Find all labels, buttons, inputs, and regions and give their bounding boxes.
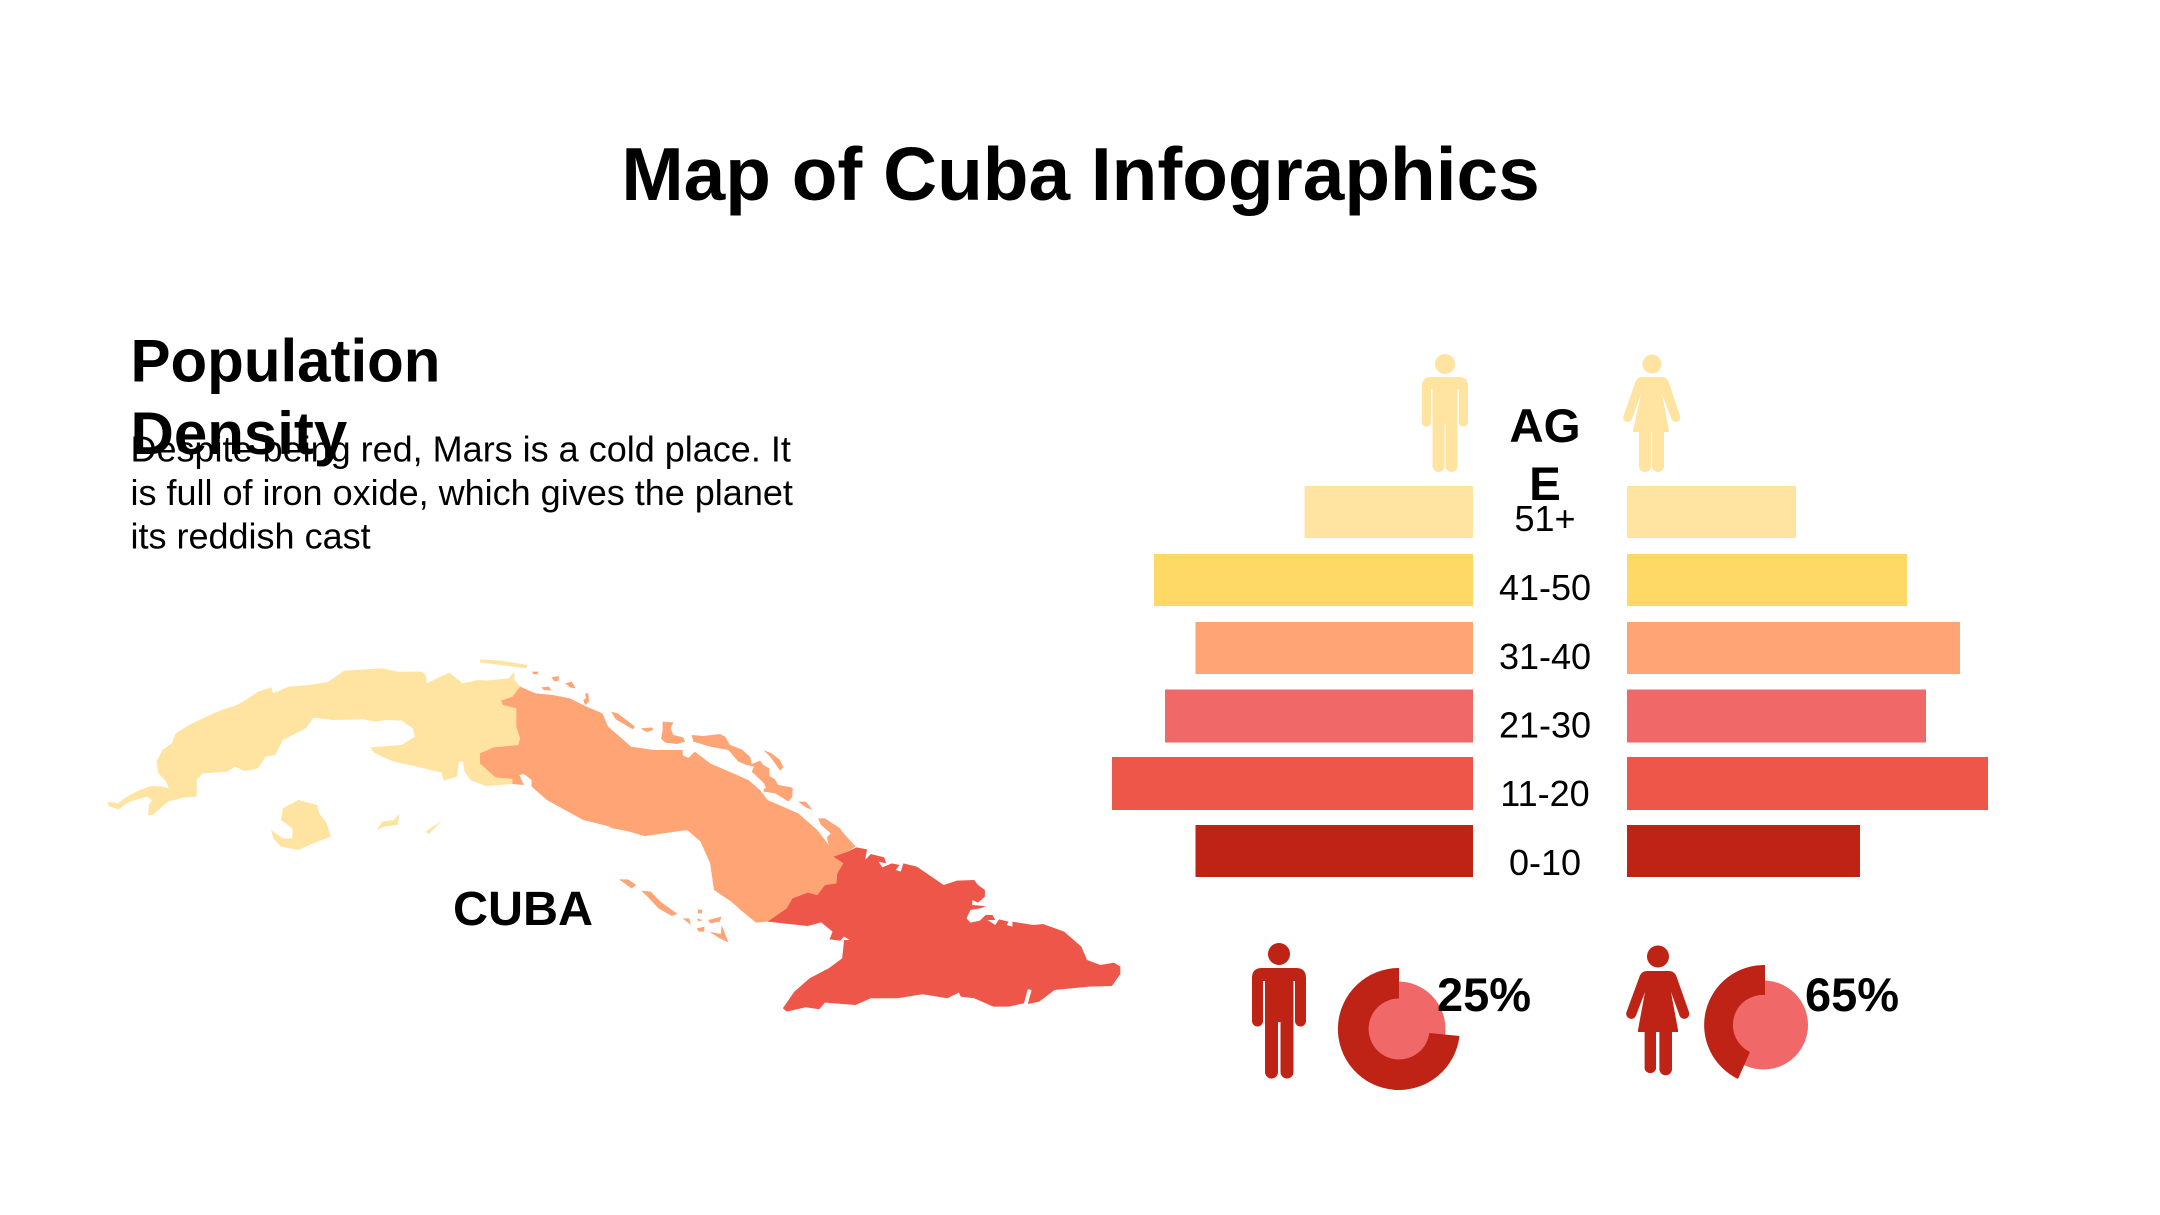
text block: description: is full of iron oxide, which gives the planet	[130, 472, 793, 513]
age labels: 51+	[1514, 498, 1576, 539]
bars: 31-40	[1196, 622, 1960, 674]
age labels	[1499, 498, 1591, 883]
icon: female pale	[1623, 354, 1680, 472]
heading: population density: Population	[130, 328, 440, 394]
icon: male pale	[1422, 354, 1468, 472]
bars: 41-50	[1154, 554, 1907, 606]
age labels: 0-10	[1509, 842, 1581, 883]
bars: 11-20	[1112, 757, 1988, 810]
age labels: 11-20	[1500, 773, 1590, 814]
age labels: 31-40	[1499, 636, 1591, 677]
value: male percent: 25%	[1437, 968, 1531, 1021]
map region: east	[768, 847, 1120, 1012]
map of Cuba	[108, 659, 1120, 1012]
map region: west	[108, 659, 528, 850]
age labels: 41-50	[1499, 567, 1591, 608]
bars: 51+	[1304, 486, 1796, 538]
text block: description: its reddish cast	[130, 516, 371, 556]
icon: female dark	[1626, 946, 1689, 1075]
heading: age	[1509, 400, 1581, 511]
map label: CUBA	[453, 882, 593, 936]
donut chart: female 65%	[1704, 965, 1808, 1079]
heading: population density	[130, 328, 440, 467]
title: Map of Cuba Infographics	[621, 132, 1540, 216]
heading: age: E	[1529, 458, 1561, 511]
value: female percent: 65%	[1805, 968, 1899, 1021]
text block: description: Despite being red, Mars is a cold place. It	[130, 428, 791, 470]
bars: 21-30	[1165, 690, 1926, 742]
donut chart: male 25%	[1338, 968, 1460, 1090]
bars: 0-10	[1196, 825, 1860, 877]
heading: age: AG	[1509, 400, 1581, 453]
population pyramid bars	[1112, 486, 1988, 877]
age labels: 21-30	[1499, 704, 1591, 746]
map region: central	[480, 672, 856, 942]
icon: male dark	[1252, 943, 1306, 1078]
text block: description	[130, 428, 793, 556]
heading: population density: Density	[130, 400, 348, 467]
